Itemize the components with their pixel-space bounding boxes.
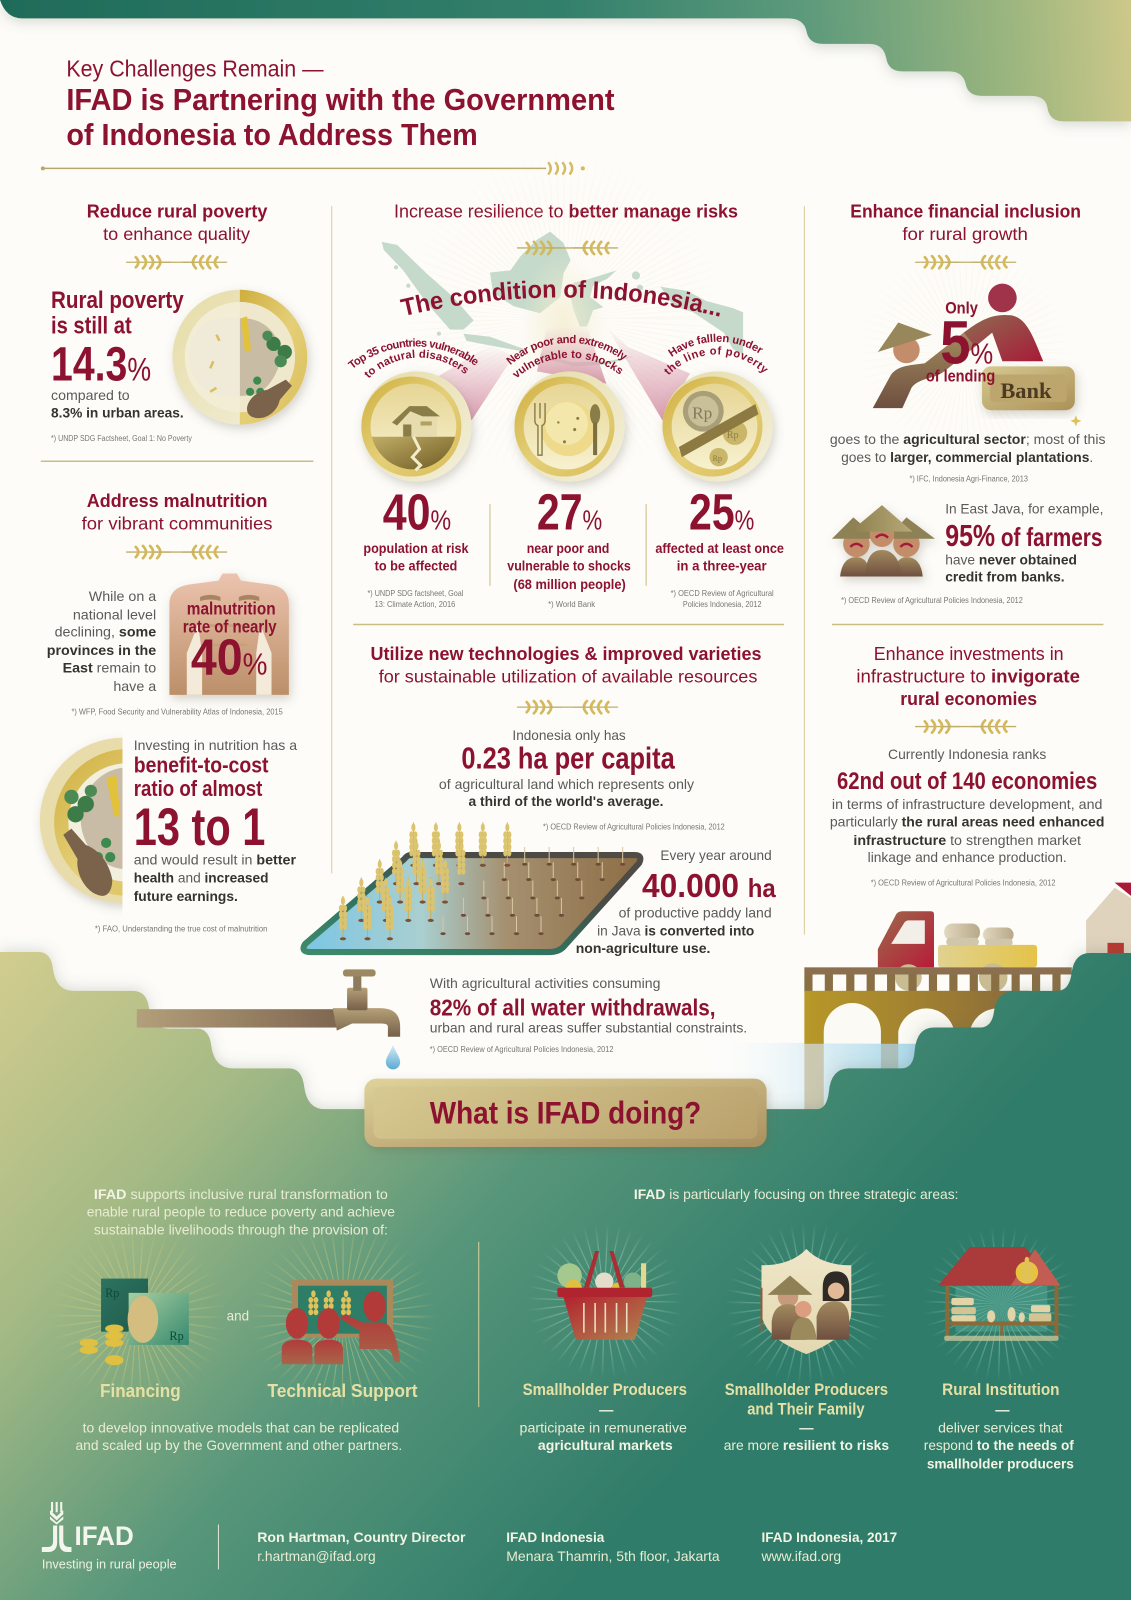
strategic area: producers and family: Smallholder Producers <box>725 1381 888 1399</box>
text: IFAD supports: sustainable livelihoods through the provision of: <box>94 1223 388 1239</box>
title: of Indonesia to Address Them <box>66 118 478 152</box>
ornament <box>127 546 227 558</box>
text: malnutrition rate: 40% <box>191 628 267 685</box>
icon: plate with meal <box>173 290 307 424</box>
heading: financial inclusion: Enhance financial inclusion <box>850 200 1081 221</box>
text: east java farmers: 95% of farmers <box>945 519 1102 553</box>
logo: IFAD: Investing in rural people <box>42 1556 177 1571</box>
title: IFAD is Partnering with the Government <box>66 83 614 117</box>
icon: financing <box>80 1271 189 1365</box>
text: east java farmers: credit from banks. <box>945 570 1065 586</box>
contact: IFAD Indonesia office <box>506 1530 720 1565</box>
title divider with wheat ornament <box>41 162 585 174</box>
curved label: the line of poverty <box>664 346 768 374</box>
panel: address malnutrition <box>40 490 297 934</box>
stat: 40 percent: 40% <box>383 484 451 541</box>
source <box>367 589 464 609</box>
text: east java farmers <box>945 501 1103 586</box>
strategic area: rural institution <box>924 1381 1074 1472</box>
icon: financing: Rp <box>105 1286 119 1300</box>
curved label: Top 35 countries vulnerable <box>348 338 478 368</box>
icon: technical support <box>282 1269 400 1364</box>
icon: financing: Rp <box>169 1329 184 1343</box>
text: paddy land conversion: non-agriculture use. <box>576 941 710 957</box>
coin: poverty line: Rp <box>712 454 722 463</box>
text: benefit to cost ratio: future earnings. <box>134 889 238 905</box>
text: paddy land conversion <box>576 848 777 957</box>
heading: infrastructure: infrastructure to invigorate <box>856 666 1080 687</box>
source: *) OECD Review of Agricultural Policies Indonesia, 2012 <box>430 1045 614 1054</box>
panel: increase resilience <box>348 166 784 609</box>
text: economy ranking <box>830 747 1104 866</box>
source: *) WFP, Food Security and Vulnerability Atlas of Indonesia, 2015 <box>71 707 283 716</box>
text: water withdrawals <box>430 976 747 1037</box>
text: IFAD supports: IFAD supports inclusive rural transformation to <box>94 1187 388 1203</box>
strategic area: rural institution: Rural Institution <box>942 1381 1060 1399</box>
text: 5 percent of lending <box>926 299 995 386</box>
text: innovative models: and scaled up by the Government and other partners. <box>76 1438 402 1454</box>
strategic area: producers and family: are more resilient to risks <box>724 1438 889 1454</box>
text: land per capita: of agricultural land which represents only <box>439 777 695 793</box>
text: land per capita: 0.23 ha per capita <box>461 741 676 775</box>
text: technical support label: Technical Support <box>267 1380 417 1401</box>
text: agricultural sector: goes to larger, commercial plantations. <box>841 450 1093 466</box>
logo: IFAD: IFAD <box>75 1521 134 1551</box>
source: Policies Indonesia, 2012 <box>683 600 762 609</box>
curved label: Have falllen under <box>668 334 763 357</box>
text: provinces: East remain to <box>63 660 156 676</box>
stat: 40 percent: to be affected <box>375 558 457 574</box>
contact: country director: r.hartman@ifad.org <box>257 1549 376 1565</box>
text: economy ranking: Currently Indonesia ranks <box>888 747 1046 763</box>
icon: farmer and bank lending: Bank <box>1000 378 1052 403</box>
text: provinces: have a <box>113 679 156 695</box>
source: *) OECD Review of Agricultural Policies Indonesia, 2012 <box>871 879 1056 888</box>
source: *) OECD Review of Agricultural Policies Indonesia, 2012 <box>841 596 1023 605</box>
text: water withdrawals: urban and rural areas suffer substantial constraints. <box>430 1021 747 1037</box>
strategic area: smallholder producers: agricultural markets <box>538 1438 673 1454</box>
illustration: bridge <box>804 967 1072 1110</box>
heading: financial inclusion <box>850 200 1081 244</box>
icon: half plate <box>38 738 122 912</box>
text: paddy land conversion: 40.000 ha <box>642 868 777 905</box>
text: economy ranking: particularly the rural areas need enhanced <box>830 815 1104 831</box>
text: paddy land conversion: of productive paddy land <box>619 905 772 921</box>
heading: increase resilience: Increase resilience to better manage risks <box>394 200 738 221</box>
heading: utilize: for sustainable utilization of available resources <box>379 667 758 687</box>
stat: 40 percent: population at risk <box>363 541 469 557</box>
text: IFAD supports: enable rural people to reduce poverty and achieve <box>87 1204 395 1220</box>
text: financing label: Financing <box>100 1380 181 1401</box>
text: water withdrawals: With agricultural activities consuming <box>430 976 660 992</box>
source: *) FAO, Understanding the true cost of malnutrition <box>95 925 267 934</box>
stat: 40 percent <box>363 484 469 574</box>
ornament <box>916 256 1016 268</box>
text: economy ranking: in terms of infrastructure development, and <box>832 797 1102 813</box>
sunburst behind map <box>477 232 650 405</box>
stat: 27 percent: near poor and <box>527 541 609 557</box>
text: benefit to cost ratio: ratio of almost <box>134 776 263 801</box>
text: east java farmers: have never obtained <box>945 552 1077 568</box>
icon: family shield <box>761 1249 851 1354</box>
text: land per capita <box>439 728 695 810</box>
title <box>66 56 614 152</box>
text: provinces: While on a <box>89 589 156 605</box>
contact: website: www.ifad.org <box>761 1549 841 1565</box>
bottom stepped green area <box>0 952 1131 1600</box>
text: 5 percent of lending: Only <box>945 299 978 317</box>
heading: infrastructure: rural economies <box>900 688 1037 709</box>
strategic area: rural institution: smallholder producers <box>927 1456 1074 1472</box>
text: poverty statistic: compared to <box>51 388 130 404</box>
heading: condition of Indonesia: The condition of Indonesia... <box>400 280 720 316</box>
contact: website <box>761 1530 897 1565</box>
source: *) OECD Review of Agricultural <box>671 589 774 598</box>
ornament <box>518 242 618 254</box>
source: *) IFC, Indonesia Agri-Finance, 2013 <box>909 475 1028 484</box>
panel: enhance financial inclusion <box>830 200 1105 605</box>
contact: website: IFAD Indonesia, 2017 <box>761 1530 897 1546</box>
contact: country director <box>257 1530 466 1565</box>
strategic area: smallholder producers: participate in remunerative <box>520 1421 687 1437</box>
coin: poverty line <box>660 334 779 490</box>
icon: water tap <box>137 969 400 1069</box>
text: poverty statistic: is still at <box>51 313 132 340</box>
heading: address malnutrition: Address malnutrition <box>87 490 267 511</box>
text: paddy land conversion: in Java is converted into <box>597 924 755 940</box>
icon: farmer and bank lending <box>873 284 1081 427</box>
text: innovative models <box>76 1421 402 1454</box>
strategic area: producers and family: and Their Family <box>747 1400 865 1418</box>
text: poverty statistic <box>51 287 184 421</box>
text: benefit to cost ratio: Investing in nutrition has a <box>134 738 297 754</box>
strategic area: rural institution: deliver services that <box>938 1421 1063 1437</box>
stat: 25 percent <box>655 484 784 574</box>
map of Indonesia <box>382 232 743 366</box>
stat: 27 percent: (68 million people) <box>513 577 626 593</box>
text: poverty statistic: Rural poverty <box>51 287 184 314</box>
text: and: and <box>227 1308 249 1324</box>
icon: three farmers <box>832 505 935 577</box>
text: provinces: national level <box>73 607 156 623</box>
contact: IFAD Indonesia office: IFAD Indonesia <box>506 1530 605 1546</box>
text: malnutrition rate: malnutrition <box>187 598 276 618</box>
text: malnutrition rate <box>183 598 277 685</box>
stat: 27 percent <box>507 484 631 593</box>
column rules <box>332 206 804 935</box>
logo: IFAD <box>42 1502 177 1571</box>
curved label <box>664 334 768 374</box>
text: provinces: provinces in the <box>47 643 156 659</box>
text: provinces: declining, some <box>55 625 156 641</box>
curved label: Near poor and extremely <box>506 334 627 365</box>
source: *) OECD Review of Agricultural Policies Indonesia, 2012 <box>543 823 725 832</box>
top stepped green band <box>0 0 1131 121</box>
ornament <box>127 256 227 268</box>
title: Key Challenges Remain — <box>66 56 324 82</box>
illustration: truck on bridge <box>878 911 1037 992</box>
heading: infrastructure <box>856 643 1080 709</box>
stat: 25 percent: 25% <box>689 484 754 541</box>
curved label: to natural disasters <box>364 350 468 378</box>
illustration: water under bridge <box>704 1043 980 1114</box>
text: benefit to cost ratio: health and increased <box>134 871 268 887</box>
panel: utilize new technologies <box>304 643 777 1054</box>
source <box>671 589 774 609</box>
text: benefit to cost ratio: benefit-to-cost <box>134 752 269 777</box>
text: three strategic areas: IFAD is particularly focusing on three strategic areas: <box>634 1187 958 1203</box>
coin: poverty line: Rp <box>727 430 739 441</box>
button: what is IFAD doing <box>364 1079 767 1147</box>
contact: country director: Ron Hartman, Country Director <box>257 1530 466 1546</box>
ornament <box>916 720 1016 733</box>
heading: address malnutrition: for vibrant communities <box>82 514 273 534</box>
text: 5 percent of lending: of lending <box>926 368 995 386</box>
text: agricultural sector: goes to the agricultural sector; most of this <box>830 432 1105 448</box>
stat: 25 percent: in a three-year <box>677 558 767 574</box>
button: what is IFAD doing: What is IFAD doing? <box>430 1094 701 1130</box>
text: benefit to cost ratio <box>134 738 297 905</box>
heading: utilize <box>371 643 761 687</box>
text: economy ranking: infrastructure to strengthen market <box>853 833 1081 849</box>
text: land per capita: a third of the world's average. <box>469 794 663 810</box>
strategic area: producers and family: — <box>799 1421 814 1437</box>
heading: address malnutrition <box>82 490 273 534</box>
strategic area: rural institution: — <box>995 1402 1010 1418</box>
icon: torso <box>169 573 289 695</box>
text: land per capita: Indonesia only has <box>512 728 626 744</box>
text: provinces <box>47 589 156 695</box>
strategic area: smallholder producers <box>520 1381 687 1454</box>
panel: reduce rural poverty <box>51 200 307 443</box>
text: poverty statistic: 8.3% in urban areas. <box>51 405 184 421</box>
pink beams <box>438 327 690 420</box>
strategic area: smallholder producers: Smallholder Producers <box>523 1381 687 1399</box>
heading: utilize: Utilize new technologies & improved varieties <box>371 643 761 664</box>
source: *) UNDP SDG factsheet, Goal <box>367 589 464 598</box>
heading: reduce rural poverty <box>87 200 268 244</box>
source: 13: Climate Action, 2016 <box>375 600 456 609</box>
coin: natural disasters <box>348 338 478 490</box>
source: *) World Bank <box>548 600 596 609</box>
icon: rural market stall <box>938 1247 1061 1343</box>
heading: reduce rural poverty: Reduce rural poverty <box>87 200 268 221</box>
contact: IFAD Indonesia office: Menara Thamrin, 5th floor, Jakarta <box>506 1549 720 1565</box>
heading: financial inclusion: for rural growth <box>902 224 1028 244</box>
coin: poverty line: Rp <box>692 403 712 422</box>
text: poverty statistic: 14.3% <box>51 339 151 392</box>
text: benefit to cost ratio: and would result in better <box>134 852 296 868</box>
text: paddy land conversion: Every year around <box>660 848 772 864</box>
curved label: vulnerable to shocks <box>512 350 622 378</box>
heading: reduce rural poverty: to enhance quality <box>103 224 250 244</box>
ornament <box>518 701 618 713</box>
strategic area: smallholder producers: — <box>599 1402 614 1418</box>
heading: infrastructure: Enhance investments in <box>874 643 1064 664</box>
coin: food vulnerable <box>506 334 631 490</box>
stat: 27 percent: 27% <box>537 484 602 541</box>
text: agricultural sector <box>830 432 1105 466</box>
stat: 25 percent: affected at least once <box>655 541 784 557</box>
text: malnutrition rate: rate of nearly <box>183 617 277 637</box>
light centre glow <box>521 253 606 396</box>
text: 5 percent of lending: 5% <box>940 308 993 376</box>
strategic area: producers and family <box>724 1381 889 1454</box>
panel: enhance investments in infrastructure <box>830 643 1104 888</box>
text: innovative models: to develop innovative models that can be replicated <box>83 1421 399 1437</box>
icon: market basket <box>557 1251 652 1340</box>
text: benefit to cost ratio: 13 to 1 <box>134 798 265 857</box>
strategic area: rural institution: respond to the needs of <box>924 1438 1074 1454</box>
text: IFAD supports <box>87 1187 395 1239</box>
text: economy ranking: linkage and enhance production. <box>868 850 1067 866</box>
text: east java farmers: In East Java, for example, <box>945 501 1103 517</box>
illustration: house <box>1086 883 1131 959</box>
source: *) UNDP SDG Factsheet, Goal 1: No Poverty <box>51 434 193 443</box>
illustration: paddy field <box>304 822 640 952</box>
text: water withdrawals: 82% of all water withdrawals, <box>430 994 716 1020</box>
stat: 27 percent: vulnerable to shocks <box>507 558 631 574</box>
